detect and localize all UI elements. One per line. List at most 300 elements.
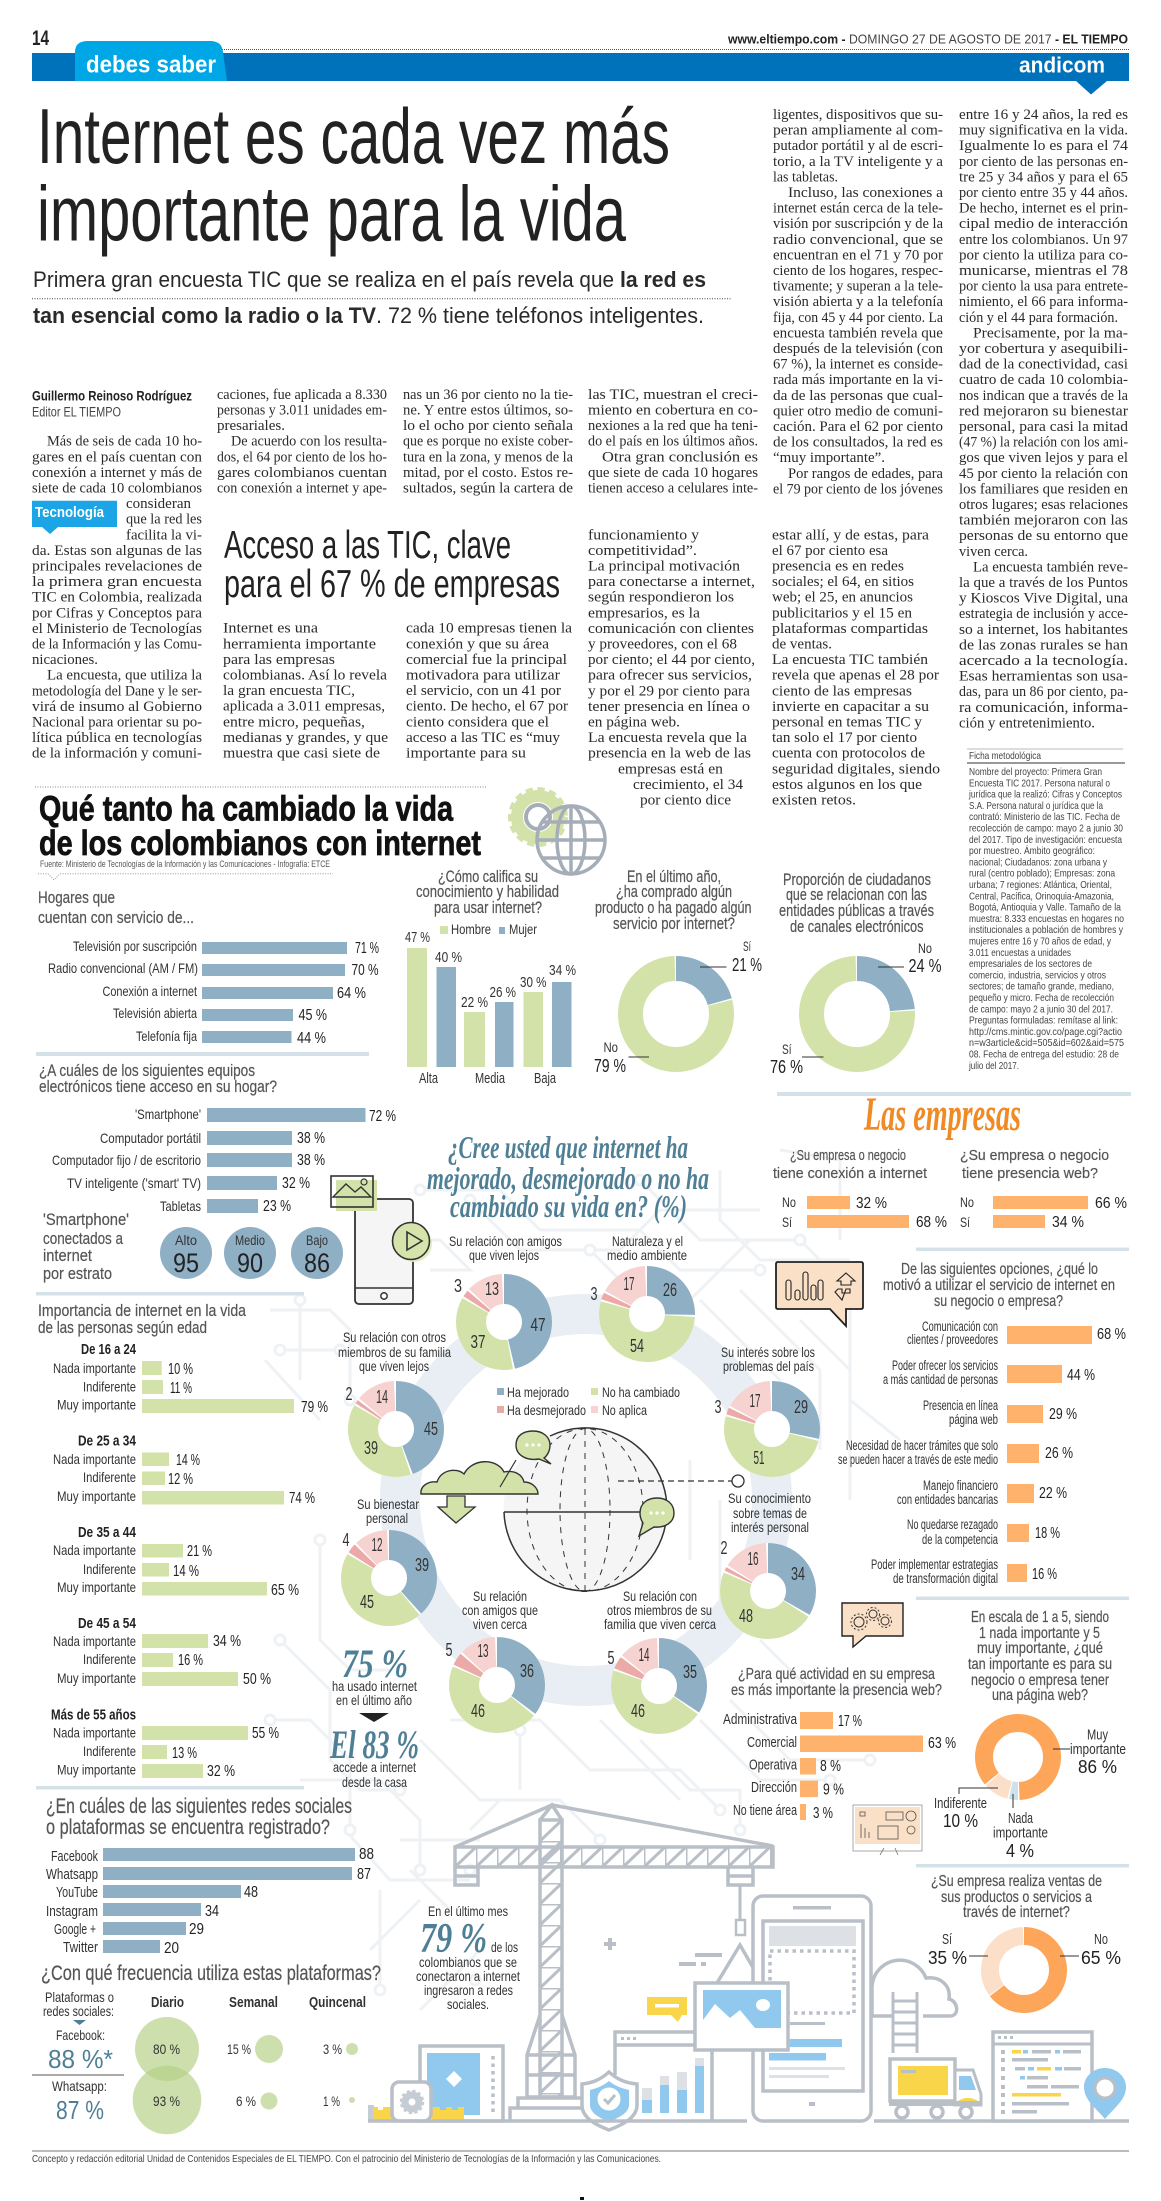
heading: cree usted que internet ha mejorado [427,1129,709,1224]
article column 5: ligentes, dispositivos que su- [773,107,943,123]
secondary article column A: para las empresas [223,652,335,668]
chart: motivos para usar internet: su negocio o empresa? [934,1293,1063,1310]
chart: motivos para usar internet: de transformación digital [893,1571,998,1586]
article column 5: visión abierta y a la telefonía [773,294,944,310]
chart: presencia web empresas [960,1147,1127,1231]
donut: problemas del país [714,1344,820,1477]
age group over 55: 55 % [252,1725,279,1742]
chart: equipos electrónicos: 72 % [369,1108,396,1125]
chart: equipos electrónicos: 32 % [282,1175,310,1192]
callout: 79 % en redes sociales [416,1903,520,2012]
callout: 79 % en redes sociales: conectaron a internet [416,1968,520,1984]
article column 2: presariales. [217,418,285,434]
article column 5: ciento de los hogares, respec- [773,263,943,279]
secondary article column B: cada 10 empresas tienen la [406,621,573,637]
chart: importancia de página web: importante [1070,1741,1126,1758]
donut: familia que vive cerca: 14 [638,1645,650,1665]
chart: cómo califica su conocimiento: 22 % [461,994,488,1011]
methodology box: 08. Fecha de entrega del estudio: 28 de [969,1048,1119,1060]
chart: cómo califica su conocimiento: conocimiento y habilidad [416,882,559,901]
chart: compra por internet: 21 % [732,955,762,975]
article column 6: nos indican que a través de la [959,388,1129,404]
callout: 75 % y 83 %: 75 % [342,1641,408,1686]
chart: conexión a internet empresas [773,1147,947,1231]
secondary article column A: entre micro, pequeñas, [223,714,365,730]
callout: 75 % y 83 % [329,1641,419,1790]
chart: hogares con servicio: Radio convencional (AM / FM) [48,960,198,976]
chart: actividad presencia web: 3 % [813,1805,833,1822]
chart: hogares con servicio: 64 % [337,985,366,1002]
article column 6: por ciento entre 35 y 44 años. [959,185,1128,201]
secondary article column C: tener presencia en línea o [588,699,750,715]
article column 1 [32,434,203,762]
chart: importancia de página web: 4 % [1006,1841,1034,1861]
article column 6: tre 25 y 34 años y para el 65 [959,169,1128,185]
methodology box: sectores; de tamaño grande, mediano, [969,981,1114,993]
article column 5: después de la televisión (con [773,341,944,357]
donut: familia que vive lejos: que viven lejos [359,1358,429,1374]
donut: problemas del país: 17 [750,1391,760,1411]
chart: frecuencia de uso: 93 % [153,2093,180,2109]
secondary article column A: aplicada a 3.011 empresas, [223,699,385,715]
article column 5: Incluso, las conexiones a [788,185,944,201]
chart: motivos para usar internet: Comunicación con [922,1319,998,1334]
article column 6: personas de su entorno que [959,528,1128,544]
donut: amigos que viven cerca: 46 [471,1701,485,1721]
chart: motivos para usar internet: 18 % [1035,1525,1060,1542]
chart: presencia web empresas: ¿Su empresa o negocio [960,1147,1109,1164]
article column 5: radio convencional, que se [773,232,943,248]
secondary article column C: presencia en la web de las [588,746,751,762]
secondary article column A: Internet es una [223,621,319,637]
secondary article column C: La principal motivación [588,558,741,574]
chart: importancia de página web: 10 % [943,1811,978,1831]
methodology box: urbana; 7 regiones: Atlántica, Oriental, [969,879,1112,891]
methodology box: 3.011 encuestas a unidades [969,947,1071,959]
secondary article column C: competitividad”. [588,543,697,559]
article column 6: Igualmente lo es para el 74 [959,138,1129,154]
article column 6: estrategia de inclusión y acce- [959,606,1128,622]
secondary article column D: existen retos. [772,792,856,808]
donut: familia que vive lejos: miembros de su familia [338,1344,451,1360]
chart: entidades públicas: que se relacionan con las [786,885,927,904]
donut: conocimiento sobre temas de interés: 34 [791,1564,805,1584]
chart: conexión a internet empresas: 32 % [856,1195,887,1212]
age group 25 to 34 [53,1434,315,1507]
article column 6: gos que viven lejos y para el [959,450,1128,466]
footer credit: Concepto y redacción editorial Unidad de Contenidos Especiales de EL TIEMPO. Con el patrocinio del Ministerio de Tecnologías de la Información y las Comunicaciones. [32,2153,661,2165]
article column 6: Precisamente, por la ma- [973,325,1128,341]
article column 5: peran ampliamente al com- [773,123,943,139]
chart: importancia de página web: 86 % [1078,1757,1117,1777]
callout: 75 % y 83 %: accede a internet [333,1759,416,1775]
article column 2: gares colombianos cuentan [217,465,388,481]
chart: motivos para usar internet: Manejo financiero [923,1478,998,1493]
smartphone por estrato: 90 [237,1248,263,1278]
chart: equipos electrónicos [39,1061,396,1215]
donut: conocimiento sobre temas de interés: 2 [720,1538,728,1558]
callout: 79 % en redes sociales: En el último mes [428,1903,508,1919]
secondary article column D: estar allí, y de estas, para [772,527,930,543]
illustration: large phone [753,1896,871,2121]
secondary article column C: crecimiento, el 34 [633,777,744,793]
article column 6: yor cobertura y asequibili- [959,341,1128,357]
chart: compra por internet: servicio por internet? [613,914,735,933]
chart: actividad presencia web: Administrativa [723,1711,798,1728]
article column 4: tienen acceso a celulares inte- [588,480,758,496]
chart: motivos para usar internet: 16 % [1032,1566,1057,1583]
chart: redes sociales: o plataformas se encuentra registrado? [46,1816,330,1839]
chart: ventas por internet: sus productos o servicios a [941,1889,1092,1906]
donut: amigos que viven lejos: 47 [530,1315,546,1335]
secondary article column C [588,527,755,808]
article column 6: so a internet, los habitantes [959,622,1128,638]
chart: redes sociales: ¿En cuáles de las siguientes redes sociales [46,1795,352,1818]
callout: 79 % en redes sociales: ingresaron a redes [424,1982,513,1998]
chart: importancia de página web: Indiferente [934,1795,987,1812]
callout: 79 % en redes sociales: 79 % [420,1916,487,1962]
callout: 75 % y 83 %: El 83 % [329,1722,419,1767]
secondary article column C: La encuesta revela que la [588,730,748,746]
chart: motivos para usar internet: 44 % [1067,1367,1095,1384]
callout: 75 % y 83 %: desde la casa [342,1774,407,1790]
secondary article column A: la gran encuesta TIC, [223,683,355,699]
chart: hogares con servicio: 44 % [297,1030,326,1047]
article column 3: lo el ocho por ciento señala [403,418,574,434]
secondary article column B: motivadora para utilizar [406,668,560,684]
secondary article column C: para ofrecer sus servicios, [588,668,752,684]
chart: hogares con servicio: 45 % [298,1007,327,1024]
chart: frecuencia de uso: 3 % [323,2041,342,2057]
secondary article column C: según respondieron los [588,590,734,606]
donut: familia que vive lejos: Su relación con otros [343,1329,446,1345]
methodology box: S.A. Persona natural o jurídica que la [969,800,1103,812]
methodology box: por muestreo. Ámbito geográfico: [969,844,1095,857]
chart: motivos para usar internet [838,1261,1126,1586]
article column 3: tura en la zona, y menos de la [403,449,574,465]
age group 25 to 34: De 25 a 34 [78,1434,136,1450]
chart: motivos para usar internet: con entidades bancarias [897,1492,998,1507]
illustration: ground line [368,2119,1129,2123]
methodology box: Encuesta TIC 2017. Persona natural o [969,777,1110,789]
article column 5: fija, con 45 y 44 por ciento. La [773,310,944,326]
donut: familia que vive cerca: 46 [631,1701,645,1721]
article column 1: TIC en Colombia, realizada [32,590,203,606]
chart: presencia web empresas: 66 % [1095,1195,1127,1212]
secondary headline: para el 67 % de empresas [224,563,560,606]
source line [38,859,333,880]
chart: redes sociales: 48 [244,1884,258,1901]
secondary article column C: funcionamiento y [588,527,700,543]
age group 35 to 44 [53,1525,299,1599]
chart: entidades públicas: Proporción de ciudadanos [783,870,931,889]
chart: entidades públicas: 76 % [770,1057,803,1077]
secondary article column D: La encuesta TIC también [772,652,929,668]
edition line: www.eltiempo.com - DOMINGO 27 DE AGOSTO DE 2017 - EL TIEMPO [727,32,1128,47]
chart: motivos para usar internet: 29 % [1049,1406,1077,1423]
main title: Internet es cada vez más [37,92,670,180]
chart: actividad presencia web: Operativa [749,1756,797,1774]
callout: 79 % en redes sociales: de los [491,1939,518,1955]
chart: entidades públicas: de canales electrónicos [790,917,924,936]
age group 16 to 24: Muy importante [57,1396,136,1412]
chart: motivos para usar internet: de la competencia [922,1532,998,1547]
donut: amigos que viven cerca: 36 [520,1661,534,1681]
article column 1: gares en el país cuentan con [32,449,203,465]
donut: conocimiento sobre temas de interés: sobre temas de [733,1505,807,1521]
age group 45 to 54: Muy importante [57,1670,136,1686]
smartphone por estrato: Alto [175,1232,197,1248]
donut: familia que vive cerca: familia que viven cerca [604,1616,716,1632]
article column 6: la que a través de los Puntos [959,575,1128,591]
donut: amigos que viven cerca [446,1588,545,1733]
section label: andicom [1019,53,1107,94]
byline: Editor EL TIEMPO [32,405,121,420]
article column 6: muy significativa en la vida. [959,123,1128,139]
chart: actividad presencia web: ¿Para qué actividad en su empresa [738,1666,935,1683]
section band [32,53,1129,81]
age group 25 to 34: 14 % [176,1452,200,1469]
donut legend [497,1384,680,1418]
article column 6: personal, para casi la mitad [959,419,1129,435]
chart: motivos para usar internet: página web [949,1412,998,1427]
secondary article column D: invierte en capacitar a su [772,699,929,715]
age group 25 to 34: Muy importante [57,1488,136,1504]
article column 6: por ciento la utiliza para co- [959,247,1128,263]
methodology box: julio del 2017. [968,1060,1019,1072]
chart: frecuencia de uso: ¿Con qué frecuencia utiliza estas plataformas? [41,1962,381,1985]
methodology box: jurídica que la realizó: Cifras y Conceptos [968,789,1122,801]
chart: presencia web empresas: tiene presencia web? [962,1165,1098,1182]
section tab: debes saber [75,41,227,81]
article column 6: acercado a la tecnología. [959,653,1128,669]
chart: motivos para usar internet: 68 % [1097,1326,1126,1343]
article column 6: De hecho, internet es el prin- [959,201,1128,217]
article column 1: de la Información y las Comu- [32,636,202,652]
secondary article column D: presencia es en redes [772,558,904,574]
main title: importante para la vida [37,170,626,258]
subtitle: . 72 % tiene teléfonos inteligentes. [376,303,704,328]
age group 16 to 24: Indiferente [83,1379,136,1395]
circuit board background [265,1150,900,2010]
illustration: globe with cloud and chat bubbles [421,1428,744,1592]
donut: naturaleza y medio ambiente: 26 [663,1280,677,1300]
chart: equipos electrónicos: TV inteligente ('smart' TV) [67,1175,201,1191]
chart: importancia por edad [38,1301,328,1780]
chart: motivos para usar internet: De las siguientes opciones, ¿qué lo [901,1261,1098,1278]
chart: hogares con servicio: Televisión abierta [113,1005,197,1021]
donut: amigos que viven cerca: viven cerca [473,1616,527,1632]
donut: conocimiento sobre temas de interés [720,1490,816,1639]
article column 5: visión por suscripción y de la [773,216,944,232]
chart: redes sociales: 88 [359,1846,374,1863]
article column 3 [403,387,574,496]
article column 6: ra comunicación, informa- [959,700,1128,716]
donut: amigos que viven cerca: 13 [478,1641,488,1661]
chart: importancia por edad: de las personas según edad [38,1318,207,1337]
chart: actividad presencia web: No tiene área [733,1802,797,1819]
chart: frecuencia de uso [32,1962,381,2134]
methodology box: Bogotá, Antioquia y Valle. Tamaño de la [969,902,1121,914]
article column 1: consideran [126,496,192,512]
secondary article column D: cuenta con protocolos de [772,746,925,762]
secondary article column C: empresas está en [618,761,724,777]
article column 1: siete de cada 10 colombianos [32,480,202,496]
donut: problemas del país: 51 [754,1448,764,1468]
chart: frecuencia de uso: 87 % [56,2095,104,2125]
age group 16 to 24: 11 % [170,1380,192,1397]
tag: Tecnología [32,501,117,534]
chart: importancia de página web: Muy [1087,1726,1108,1744]
callout: 79 % en redes sociales: colombianos que se [419,1954,517,1970]
secondary article column C: empresarios, es la [588,605,701,621]
donut: problemas del país: problemas del país [723,1358,814,1374]
secondary article column B: acceso a las TIC es “muy [406,730,561,746]
article column 4: las TIC, muestran el creci- [588,387,758,403]
article column 5: quier otro medio de comuni- [773,403,943,419]
article column 4 [588,387,758,496]
chart: cómo califica su conocimiento: Alta [419,1070,438,1087]
donut: familia que vive cerca: Su relación con [623,1588,697,1604]
secondary article column C: por ciento dice [640,792,731,808]
article column 6: entre los colombianos. Un 97 [959,232,1128,248]
age group 35 to 44: De 35 a 44 [78,1525,136,1541]
article column 4: Otra gran conclusión es [602,449,758,465]
chart: importancia de página web: En escala de 1 a 5, siendo [971,1609,1109,1626]
donut: conocimiento sobre temas de interés: Su conocimiento [728,1490,811,1506]
donut: bienestar personal: 39 [415,1555,429,1575]
icon: gear and globe [511,790,605,874]
chart: compra por internet: No [604,1039,618,1055]
secondary headline [224,524,560,606]
chart: importancia de página web: muy importante, ¿qué [977,1640,1103,1657]
chart: hogares con servicio [38,888,379,1047]
secondary article column D: el 67 por ciento esa [772,543,889,559]
article column 6: los familiares que residen en [959,481,1129,497]
secondary article column D: ciento de las empresas [772,683,912,699]
page header [32,27,1129,94]
chart: importancia de página web: tan importante es para su [968,1656,1112,1673]
article column 1: principales revelaciones de [32,558,202,574]
article column 2: caciones, fue aplicada a 8.330 [217,387,387,403]
donut: naturaleza y medio ambiente: 17 [624,1274,634,1294]
methodology box: comercio, industria, servicios y otros [969,969,1106,981]
donut legend: Ha desmejorado [507,1402,586,1418]
smartphone por estrato: por estrato [43,1264,112,1283]
methodology box: Central, Pacífica, Orinoquia-Amazonia, [969,890,1114,902]
secondary article column B: importante para su [406,746,526,762]
secondary article column B: comercial fue la principal [406,652,567,668]
age group 35 to 44: 14 % [173,1563,199,1580]
chart: actividad presencia web: 63 % [928,1735,956,1752]
secondary article column D: publicitarios y el 15 en [772,605,913,621]
secondary article column D: estos algunos en los que [772,777,922,793]
donut: familia que vive lejos [338,1329,451,1477]
heading: Las empresas: Las empresas [863,1088,1021,1141]
donut: familia que vive cerca: 35 [683,1662,697,1682]
article column 1: de la información y comuni- [32,746,202,762]
chart: ventas por internet: 65 % [1081,1948,1121,1968]
article column 6: y Kioscos Vive Digital, una [959,591,1129,607]
subtitle: la red es [620,267,706,292]
article column 6: 45 por ciento la relación con [959,466,1129,482]
chart: cómo califica su conocimiento: para usar internet? [434,898,542,917]
chart: motivos para usar internet: 22 % [1039,1485,1067,1502]
donut: bienestar personal: 12 [372,1535,382,1555]
donut: amigos que viven cerca: Su relación [473,1588,527,1604]
secondary article column B [406,621,573,762]
methodology box: nacional; Ciudadanos: zona urbana y [969,856,1108,868]
chart: compra por internet: ¿ha comprado algún [616,882,732,901]
article column 5: 67 %), la internet es conside- [773,357,943,373]
article column 6: cuatro de cada 10 colombia- [959,372,1128,388]
chart: compra por internet: producto o ha pagado algún [595,898,752,917]
chart: importancia por edad: Importancia de internet en la vida [38,1301,246,1320]
illustration: hanging image panel [695,1983,788,2050]
donut: bienestar personal: 45 [360,1592,374,1612]
donut legend: Ha mejorado [507,1384,569,1400]
byline: Guillermo Reinoso Rodríguez [32,388,192,404]
callout: 75 % y 83 %: ha usado internet [332,1678,417,1694]
article column 6: La encuesta también reve- [973,559,1128,575]
article column 1: que la red les [126,512,202,528]
chart: importancia de página web: importante [993,1824,1048,1842]
chart: redes sociales: Twitter [63,1939,98,1956]
methodology box: rural (centro poblado); Empresas: zona [969,868,1115,880]
article column 6: dad de la conectividad, casi [959,357,1128,373]
age group 16 to 24: 10 % [168,1361,193,1378]
article column 5: tivamente; y superan a la tele- [773,279,943,295]
age group 25 to 34: Nada importante [53,1451,136,1467]
chart: motivos para usar internet: se pueden hacer a través de este medio [838,1452,998,1467]
article column 5: de los consultados, la red es [773,435,943,451]
illustration: truck [889,2059,981,2118]
secondary article column A [223,621,388,762]
donut: familia que vive lejos: 39 [364,1438,378,1458]
age group 45 to 54: Indiferente [83,1651,136,1667]
chart: redes sociales: 34 [205,1903,219,1920]
chart: presencia web empresas: Sí [960,1214,970,1230]
secondary article column D: sociales; el 64, en sitios [772,574,914,590]
chart: hogares con servicio: Hogares que [38,888,115,907]
donut: amigos que viven lejos: 37 [470,1332,486,1352]
chart: conexión a internet empresas: Sí [782,1214,792,1230]
age group 16 to 24: Nada importante [53,1360,136,1376]
donut: amigos que viven lejos: 3 [454,1276,462,1296]
secondary headline: Acceso a las TIC, clave [224,524,511,567]
illustration: code window [993,2032,1092,2121]
chart: equipos electrónicos: 38 % [297,1130,325,1147]
article column 6: red mejoraron su bienestar [959,403,1128,419]
chart: redes sociales: Instagram [46,1903,98,1920]
chart: cómo califica su conocimiento: ¿Cómo califica su [438,867,538,886]
chart: redes sociales: 20 [164,1940,179,1957]
main title [37,92,670,258]
age group over 55: Muy importante [57,1762,136,1778]
article column 6: ción y el 44 para formación. [959,310,1118,326]
chart: hogares con servicio: Telefonía fija [136,1028,197,1044]
article column 6: municarse, mientras el 78 [959,263,1128,279]
secondary article column A: herramienta importante [223,636,376,652]
chart: cómo califica su conocimiento: Media [475,1070,505,1087]
chart: redes sociales: 29 [189,1921,204,1938]
donut: amigos que viven lejos: 13 [485,1279,499,1299]
secondary article column A: colombianas. Así lo revela [223,668,388,684]
article column 6: también mejoraron con las [959,513,1128,529]
chart: conexión a internet empresas: ¿Su empresa o negocio [790,1147,906,1164]
age group 35 to 44: Nada importante [53,1542,136,1558]
donut: amigos que viven cerca: con amigos que [462,1602,538,1618]
